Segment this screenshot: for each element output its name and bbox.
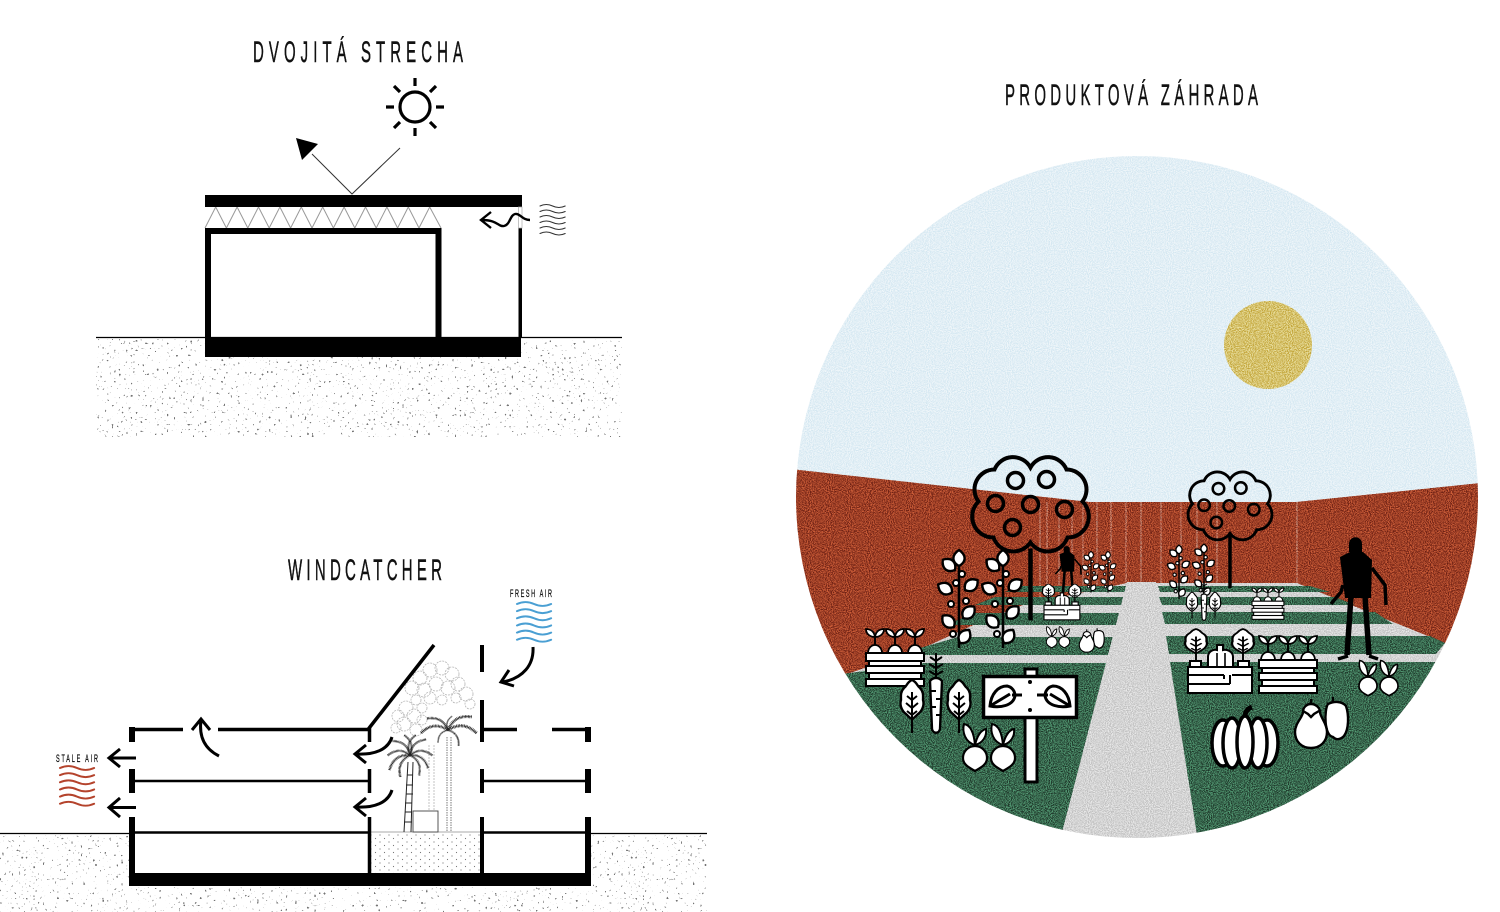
- heading: double roof: DVOJITÁ STRECHA: [253, 35, 463, 70]
- section: building with double roof: [205, 195, 522, 357]
- icon: fresh air waves: [517, 602, 551, 642]
- panel: productive garden: [780, 78, 1490, 850]
- eggplant and pepper: [1079, 628, 1348, 748]
- garden scene background: [780, 150, 1490, 850]
- label: fresh air: FRESH AIR: [510, 587, 552, 600]
- floor slab: [129, 873, 591, 886]
- short palm: [387, 734, 433, 832]
- background tree: [391, 661, 475, 832]
- small apple tree: [1188, 472, 1272, 588]
- climbing plants: [935, 544, 1216, 648]
- ground line: [96, 336, 622, 338]
- panel: windcatcher diagram: [0, 555, 707, 912]
- radishes: [963, 627, 1398, 771]
- right vegetable beds: [1158, 586, 1445, 833]
- tall palm: [420, 713, 478, 832]
- garden sign: [984, 669, 1076, 782]
- pumpkin: [1212, 707, 1278, 768]
- left vegetable beds: [845, 586, 1126, 830]
- wall joints: [1040, 502, 1297, 600]
- distant figure: [1055, 546, 1081, 597]
- crates: [866, 584, 1317, 693]
- planter box: [413, 811, 438, 832]
- section: building with windcatcher: [129, 645, 591, 873]
- foreground figure: [1331, 537, 1386, 659]
- courtyard soil: [371, 833, 481, 873]
- ground line: [0, 832, 707, 834]
- arrow: reflected sunlight: [296, 138, 400, 194]
- arrow: wavy airflow: [481, 212, 530, 228]
- central path: [1062, 582, 1156, 830]
- sky: [790, 150, 1490, 510]
- soil texture: [0, 835, 707, 912]
- film grain: [790, 150, 1490, 850]
- icon: sun: [386, 78, 444, 136]
- roof truss: [205, 207, 441, 228]
- sun disc: [1224, 301, 1312, 389]
- soil texture: [96, 339, 622, 437]
- label: stale air: STALE AIR: [56, 752, 98, 765]
- heading: windcatcher: WINDCATCHER: [288, 555, 442, 588]
- panel: double roof diagram: [96, 35, 622, 437]
- icon: air waves: [540, 204, 565, 235]
- icon: stale air waves: [60, 766, 94, 806]
- brick wall: [796, 470, 1478, 674]
- large apple tree: [972, 457, 1089, 620]
- arrows: airflow: [109, 647, 533, 817]
- heading: productive garden: PRODUKTOVÁ ZÁHRADA: [1005, 78, 1258, 113]
- leafy greens and carrots: [900, 582, 1221, 733]
- ground base: [790, 575, 1490, 845]
